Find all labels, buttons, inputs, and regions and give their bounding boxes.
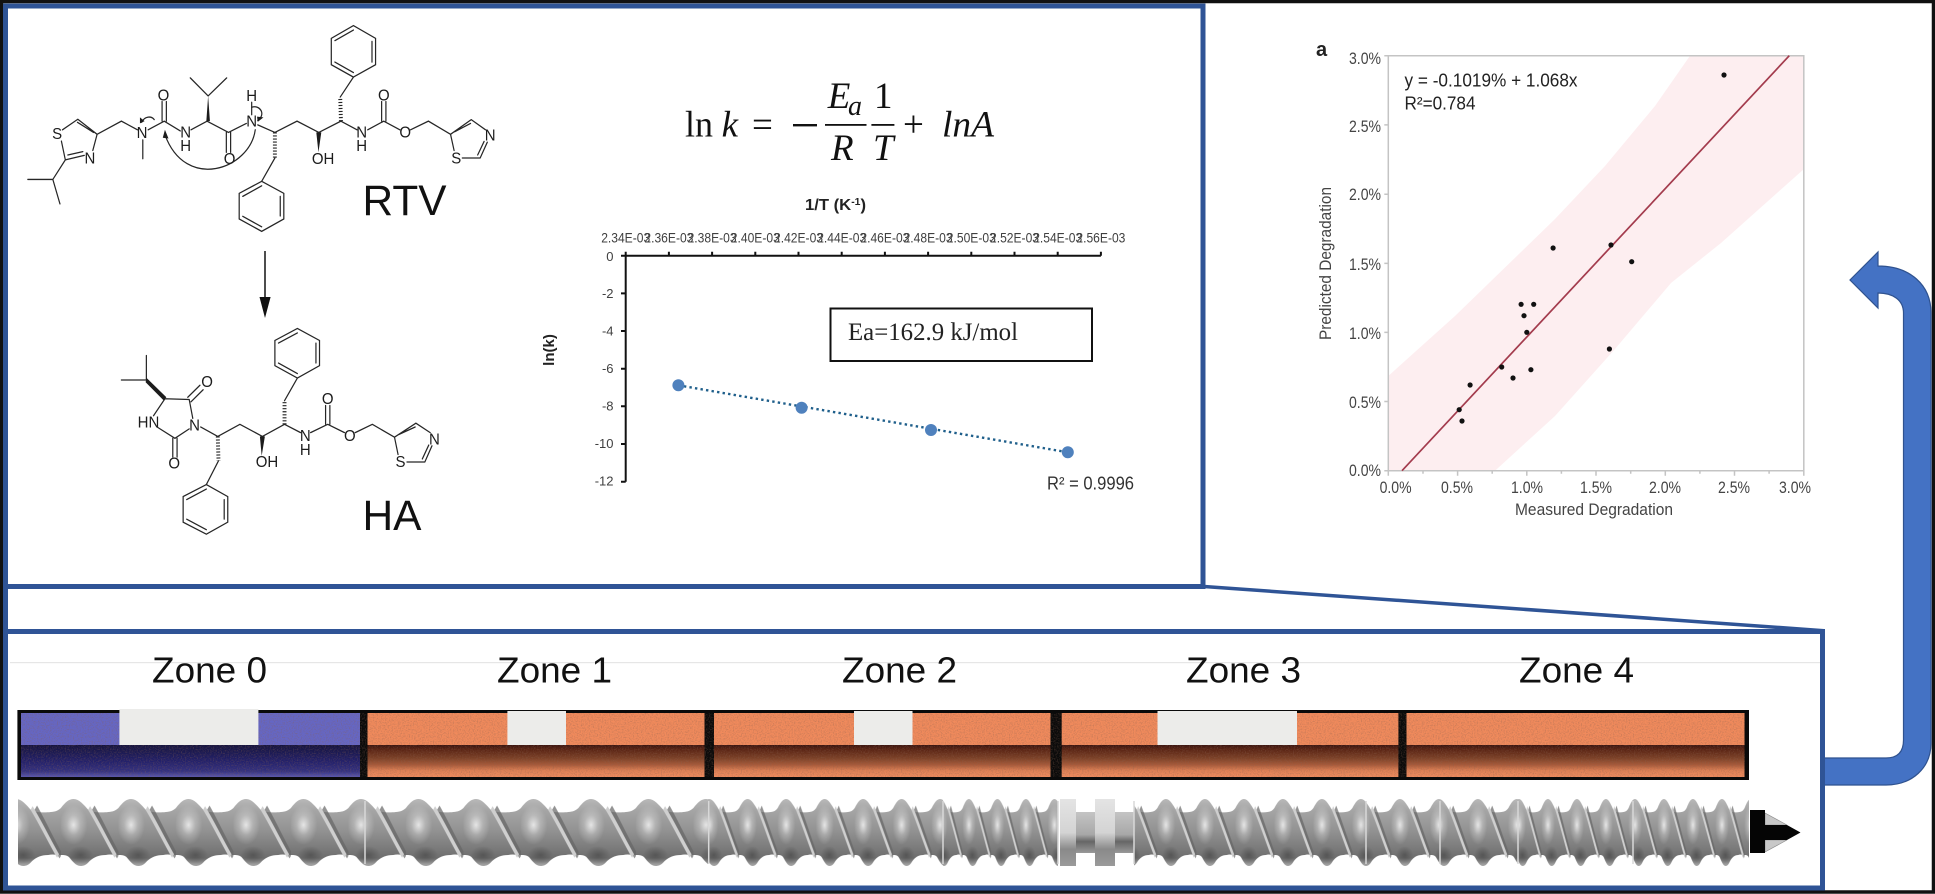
x tick labels: 2.0% <box>1649 478 1681 497</box>
data points <box>672 379 1074 458</box>
y tick labels <box>1349 49 1381 480</box>
y axis tick labels: -4 <box>602 324 614 338</box>
equation: Arrhenius: k <box>722 105 739 146</box>
zone 3 heated section <box>1062 713 1398 777</box>
chemical structure: RTV: H <box>246 88 257 105</box>
chemical structure: HA: N <box>189 417 200 434</box>
panel border: kinetics <box>6 6 1203 586</box>
chemical structure: HA: O <box>168 455 180 473</box>
y tick labels: 1.0% <box>1349 324 1381 343</box>
y axis tick labels: -6 <box>602 361 614 376</box>
regression equation <box>1404 70 1578 114</box>
label: HA: HA <box>362 492 422 540</box>
chemical structure: RTV: O <box>158 87 169 105</box>
y axis tick labels: -12 <box>595 474 614 488</box>
x tick labels: 0.0% <box>1380 478 1412 497</box>
x axis tick labels: 2.48E-03 <box>904 230 953 246</box>
scatter points <box>1457 72 1727 424</box>
chemical structure: HA: HN <box>138 414 159 431</box>
x axis title: Measured Degradation <box>1515 500 1673 519</box>
chemical structure: RTV <box>28 26 496 231</box>
axis title: 1/T: 1/T (K <box>805 197 849 214</box>
panel: degradation scatter plot <box>1316 39 1811 519</box>
zone titles: Zone 1 <box>497 650 612 691</box>
chemical structure: HA: N <box>300 428 311 445</box>
zone titles: Zone 4 <box>1519 650 1634 691</box>
zone titles: Zone 3 <box>1186 650 1301 691</box>
chemical structure: RTV: O <box>224 151 235 168</box>
chemical structure: HA: H <box>300 441 311 459</box>
axis title: 1/T: ) <box>860 197 866 214</box>
panel letter: a <box>1316 39 1328 61</box>
x axis tick labels: 2.40E-03 <box>731 230 780 246</box>
x tick labels <box>1380 478 1811 497</box>
label: RTV: RTV <box>362 177 447 225</box>
chart: Arrhenius plot <box>541 197 1134 494</box>
equation: Arrhenius: ln <box>685 105 713 146</box>
y axis tick labels <box>595 249 614 488</box>
x axis tick labels: 2.36E-03 <box>644 230 694 246</box>
x tick labels: 3.0% <box>1779 478 1811 497</box>
chemical structure: RTV: N <box>180 124 191 142</box>
chemical structure: HA: O <box>344 428 356 445</box>
R squared: R² = 0.9996 <box>1047 474 1134 494</box>
chemical structure: RTV: H <box>180 138 191 155</box>
zone 4 heated section <box>1406 713 1744 777</box>
chemical structure: RTV: N <box>246 113 257 131</box>
axis title: ln(k): ln(k) <box>541 334 558 366</box>
x axis tick labels: 2.44E-03 <box>817 230 866 246</box>
axes <box>621 252 1101 482</box>
connector line from kinetics panel to extruder panel <box>1204 586 1824 631</box>
panel: extruder zones <box>6 586 1822 888</box>
zone 2 heated section <box>714 713 1050 777</box>
fit line <box>1402 56 1789 471</box>
y tick labels: 2.0% <box>1349 185 1381 204</box>
chemical structure: HA: S <box>396 454 406 471</box>
zone 1 heated section <box>368 713 704 777</box>
zone titles: Zone 0 <box>152 650 267 691</box>
x tick labels: 2.5% <box>1718 478 1750 497</box>
x axis tick labels: 2.38E-03 <box>688 230 737 246</box>
equation: Arrhenius: a <box>848 91 862 122</box>
regression equation: y = -0.1019% + 1.068x <box>1404 70 1578 90</box>
chemical structure: RTV: S <box>52 125 62 143</box>
x axis tick labels <box>601 230 1126 246</box>
speckle texture on heat bar <box>21 713 1745 777</box>
x tick labels: 0.5% <box>1441 478 1473 497</box>
x axis tick labels: 2.52E-03 <box>990 230 1039 246</box>
y axis tick labels: -10 <box>595 436 614 451</box>
zone titles: Zone 2 <box>842 650 957 691</box>
twin screw illustration <box>18 799 1800 866</box>
y axis title: Predicted Degradation <box>1316 187 1335 340</box>
x axis tick labels: 2.42E-03 <box>774 230 823 246</box>
unheated feed and vent windows <box>119 709 1297 745</box>
callout: activation energy: Ea=162.9 kJ/mol <box>848 319 1018 346</box>
equation: Arrhenius: 1 <box>874 76 892 117</box>
axis title: 1/T: -1 <box>851 197 861 208</box>
x axis tick labels: 2.56E-03 <box>1076 230 1126 246</box>
equation: Arrhenius: T <box>873 128 896 169</box>
x axis tick labels: 2.50E-03 <box>947 230 996 246</box>
chemical structure: RTV: N <box>485 127 496 145</box>
zone 0 cold section <box>21 713 360 777</box>
zone titles <box>152 650 1634 691</box>
equation: Arrhenius: R <box>830 128 854 169</box>
faint rule behind zone titles <box>10 662 1820 663</box>
arrow: extruder to scatter plot <box>1822 252 1931 785</box>
equation: Arrhenius: = <box>752 105 773 146</box>
chemical structure: HA: O <box>322 391 334 408</box>
y axis tick labels: -8 <box>602 398 614 414</box>
x axis tick labels: 2.46E-03 <box>860 230 910 246</box>
plot frame <box>1384 56 1804 476</box>
equation: Arrhenius: + <box>903 105 924 146</box>
x tick labels: 1.0% <box>1511 478 1543 497</box>
y axis tick labels: 0 <box>606 249 614 264</box>
chemical structure: RTV: H <box>356 138 367 155</box>
x axis tick labels: 2.34E-03 <box>601 230 650 246</box>
arrow: reaction <box>260 251 271 318</box>
trend line <box>678 385 1068 452</box>
y axis tick labels: -2 <box>602 286 614 301</box>
chemical structure: RTV: O <box>399 124 411 142</box>
regression equation: R²=0.784 <box>1404 94 1476 114</box>
confidence band <box>1388 56 1804 471</box>
callout: activation energy <box>830 308 1092 361</box>
chemical structure: RTV: N <box>85 150 95 167</box>
chemical structure: HA <box>121 328 440 534</box>
chemical structure: RTV: N <box>356 124 367 142</box>
chemical structure: HA: OH <box>256 454 278 471</box>
x axis tick labels: 2.54E-03 <box>1033 230 1082 246</box>
panel: kinetics and chemistry <box>6 6 1203 586</box>
equation: Arrhenius: E <box>827 76 850 117</box>
barrel heat bar <box>17 709 1749 780</box>
chemical structure: HA: N <box>429 431 440 448</box>
y tick labels: 1.5% <box>1349 255 1381 274</box>
kneading block <box>1060 799 1134 866</box>
chemical structure: RTV: N <box>137 125 148 142</box>
screw tip <box>1750 810 1800 853</box>
chemical structure: RTV: O <box>378 87 390 105</box>
panel border: extruder <box>6 586 1822 888</box>
y tick labels: 2.5% <box>1349 117 1381 136</box>
chemical structure: HA: O <box>201 374 213 391</box>
equation: Arrhenius: lnA <box>942 105 994 146</box>
chemical structure: RTV: OH <box>312 151 334 168</box>
x tick labels: 1.5% <box>1580 478 1612 497</box>
chemical structure: RTV: S <box>451 150 461 167</box>
y tick labels: 0.0% <box>1349 461 1381 480</box>
y tick labels: 0.5% <box>1349 393 1381 412</box>
equation: Arrhenius <box>685 76 994 169</box>
y tick labels: 3.0% <box>1349 49 1381 68</box>
